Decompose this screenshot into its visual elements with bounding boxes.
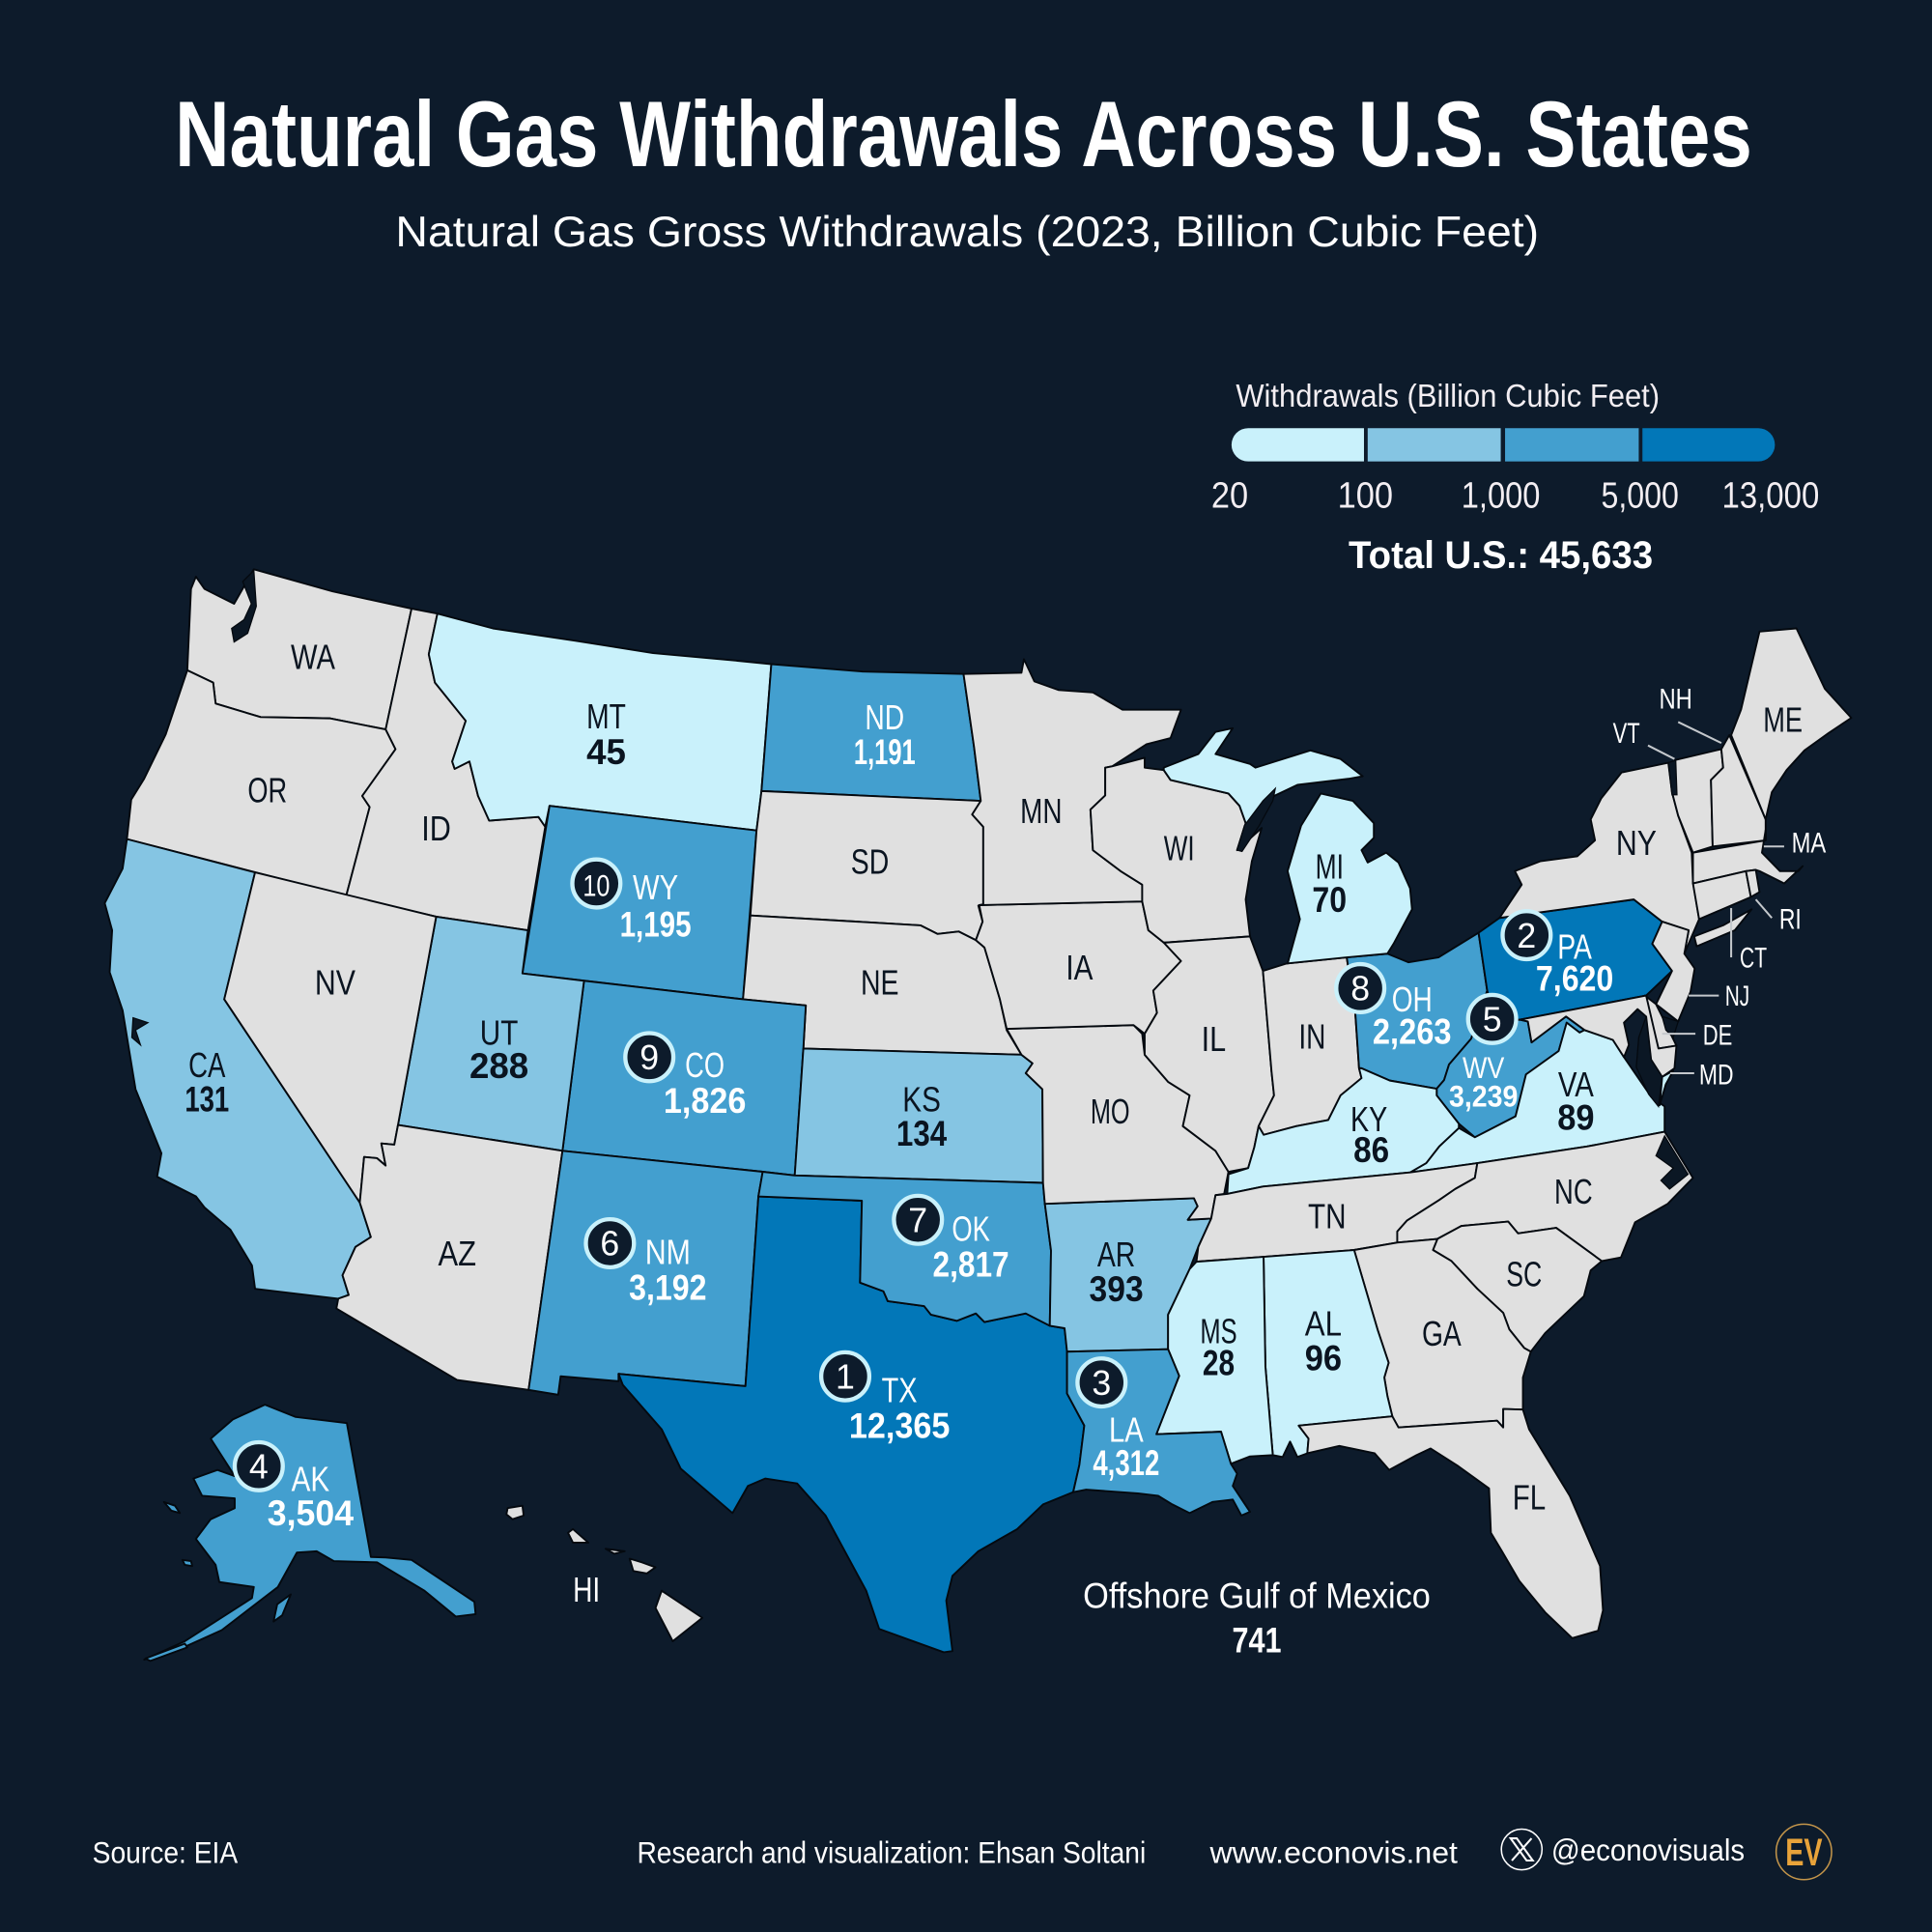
badge 10 WY: 10 <box>582 867 610 902</box>
state: GA <box>1354 1239 1531 1428</box>
footer handle: @econovisuals <box>1551 1833 1745 1867</box>
state: KY <box>1227 1068 1459 1194</box>
legend: 100 <box>1338 475 1393 517</box>
state labels without data: NV <box>315 963 355 1002</box>
labels for small states outside the map: CT <box>1740 942 1767 974</box>
state: IA <box>976 901 1181 1034</box>
state labels without data: NY <box>1616 824 1657 863</box>
state labels without data: ME <box>1763 701 1803 740</box>
value labels on light states: KS <box>902 1081 941 1120</box>
labels for small states outside the map: DE <box>1703 1020 1732 1052</box>
labels for small states outside the map: HI <box>573 1571 600 1609</box>
labels for small states outside the map: NH <box>1659 683 1692 715</box>
value labels on light states: 393 <box>1090 1269 1144 1309</box>
state: MI lower peninsula <box>1287 793 1412 963</box>
state: MT <box>429 613 771 831</box>
state labels without data: IN <box>1298 1017 1325 1056</box>
value labels on dark states <box>268 698 1613 1533</box>
state: AL <box>1264 1250 1392 1457</box>
badge 4 AK <box>235 1442 283 1491</box>
value labels on light states: VA <box>1558 1065 1594 1104</box>
legend: 5,000 <box>1602 475 1679 517</box>
state: HI Maui <box>630 1559 656 1574</box>
state: OR <box>127 670 395 895</box>
state: HI Kauai <box>506 1506 524 1520</box>
state: AK Aleutians <box>146 1644 187 1661</box>
state: NH <box>1711 735 1766 846</box>
state: HI Oahu <box>568 1529 588 1543</box>
state: MN <box>963 659 1181 905</box>
state: WA <box>187 569 412 729</box>
icon: X logo <box>1501 1829 1542 1870</box>
value labels on dark states: OH <box>1392 980 1433 1019</box>
state: LA <box>1067 1350 1250 1516</box>
subtitle: Natural Gas Gross Withdrawals (2023, Billion Cubic Feet) <box>395 209 1539 256</box>
footer website: www.econovis.net <box>1209 1835 1458 1870</box>
footer source: Source: EIA <box>93 1835 239 1870</box>
state: NJ <box>1652 922 1694 1021</box>
state: ID <box>346 609 545 930</box>
state labels without data: FL <box>1513 1478 1546 1517</box>
state: MA <box>1693 830 1803 884</box>
state labels without data: WA <box>291 639 335 677</box>
value labels on dark states: WY <box>633 868 678 907</box>
logo: EV: EV <box>1785 1832 1823 1874</box>
state: NY <box>1499 763 1699 953</box>
value labels on light states: 45 <box>586 732 626 772</box>
state labels without data: MN <box>1020 792 1062 831</box>
offshore callout <box>1083 1577 1431 1660</box>
labels for small states outside the map: RI <box>1779 904 1802 936</box>
state: IL <box>1145 936 1274 1172</box>
offshore callout: Offshore Gulf of Mexico <box>1083 1577 1431 1616</box>
state: WI <box>1091 757 1262 943</box>
value labels on light states: MI <box>1316 847 1344 886</box>
value labels on dark states: WV <box>1463 1050 1505 1085</box>
value labels on dark states: 3,504 <box>268 1493 354 1533</box>
badge 3 LA <box>1077 1358 1125 1406</box>
state: NE <box>743 916 1021 1055</box>
state: SD <box>751 791 983 940</box>
badge 6 NM <box>586 1219 634 1267</box>
state: AK Kodiak <box>273 1595 291 1622</box>
state: KS <box>795 1048 1043 1182</box>
value labels on light states: KY <box>1350 1100 1387 1139</box>
state: NY Long Island <box>1694 909 1751 947</box>
value labels on dark states: NM <box>645 1234 691 1272</box>
state labels without data: IA <box>1065 949 1094 987</box>
value labels on light states: 96 <box>1305 1338 1342 1378</box>
state: ND <box>761 665 980 801</box>
state: TX <box>618 1197 1084 1652</box>
badge 7 OK: 7 <box>908 1202 927 1240</box>
state labels without data: NC <box>1554 1173 1593 1211</box>
state: AK St Lawrence Island <box>164 1502 180 1513</box>
badge 9 CO: 9 <box>639 1038 659 1077</box>
value labels on light states: MS <box>1200 1312 1237 1350</box>
rank badges <box>235 860 1550 1491</box>
value labels on light states: UT <box>480 1014 518 1053</box>
value labels on dark states: 4,312 <box>1093 1443 1159 1483</box>
state labels without data: TN <box>1308 1198 1346 1236</box>
legend: Total U.S.: 45,633 <box>1349 534 1653 577</box>
value labels on dark states: 2,263 <box>1373 1011 1452 1051</box>
value labels on light states: 288 <box>469 1046 528 1086</box>
state: VA <box>1410 1023 1664 1173</box>
value labels on dark states: ND <box>865 698 904 737</box>
state: DE <box>1645 996 1676 1048</box>
state: CO <box>562 980 806 1176</box>
state: RI <box>1746 870 1759 897</box>
value labels on dark states: CO <box>685 1046 724 1085</box>
state: AR <box>1045 1198 1211 1351</box>
value labels on dark states: 3,192 <box>629 1268 707 1308</box>
value labels on dark states: 1,191 <box>854 732 916 772</box>
state: VT <box>1672 750 1723 853</box>
value labels on light states: 28 <box>1203 1343 1235 1382</box>
state labels without data: GA <box>1422 1315 1462 1353</box>
state labels without data: NE <box>861 963 898 1002</box>
value labels on light states: CA <box>188 1046 226 1085</box>
map of U.S. states <box>104 569 1851 1661</box>
state: NM <box>528 1151 763 1395</box>
value labels on dark states: PA <box>1557 927 1592 966</box>
value labels on dark states: 7,620 <box>1536 959 1613 999</box>
state: MO <box>1007 1025 1229 1220</box>
state: CA <box>104 839 371 1298</box>
value labels on light states: AL <box>1305 1305 1342 1344</box>
water cut-outs: Puget Sound, bays and lakes <box>131 571 1688 1189</box>
state labels without data: OR <box>247 771 287 810</box>
state: MS <box>1156 1257 1273 1463</box>
labels for small states outside the map: MD <box>1699 1059 1734 1091</box>
footer credit: Research and visualization: Ehsan Soltani <box>637 1835 1146 1870</box>
labels for small states outside the map: NJ <box>1725 980 1749 1012</box>
state: HI Big Island <box>656 1591 702 1641</box>
badge 5 WV: 5 <box>1483 1001 1502 1039</box>
state: CT <box>1693 871 1750 920</box>
state labels without data: MO <box>1091 1093 1130 1131</box>
state labels without data: AZ <box>438 1235 476 1273</box>
value labels on light states: 131 <box>185 1080 229 1120</box>
value labels on light states: 86 <box>1353 1130 1389 1170</box>
badge 2 PA: 2 <box>1517 917 1536 955</box>
labels for small states outside the map <box>573 683 1827 1609</box>
value labels on dark states: AK <box>292 1460 329 1498</box>
state: WY <box>523 806 756 999</box>
value labels on dark states: 2,817 <box>933 1244 1009 1284</box>
legend: Withdrawals (Billion Cubic Feet) <box>1236 379 1660 414</box>
offshore callout: 741 <box>1233 1620 1282 1660</box>
badge 5 WV <box>1468 995 1517 1043</box>
logo: EV <box>1776 1824 1832 1880</box>
badge 1 TX <box>821 1352 869 1401</box>
legend: 13,000 <box>1722 475 1819 517</box>
state labels without data: WI <box>1164 829 1195 867</box>
state labels without data: SD <box>851 842 889 881</box>
state: AK Nunivak Island <box>183 1560 192 1566</box>
value labels on dark states: 1,195 <box>620 904 692 944</box>
state: UT <box>398 917 584 1151</box>
value labels on light states: 134 <box>896 1114 948 1153</box>
value labels on dark states: OK <box>952 1209 990 1248</box>
legend <box>1211 379 1819 577</box>
badge 6 NM: 6 <box>600 1225 619 1264</box>
leader lines for small states <box>1648 722 1784 1073</box>
value labels on light states: AR <box>1097 1236 1135 1274</box>
value labels on dark states: TX <box>882 1372 918 1410</box>
badge 8 OH <box>1336 964 1384 1012</box>
state: OK <box>758 1172 1051 1325</box>
badge 2 PA <box>1502 911 1550 959</box>
state: MI upper peninsula <box>1164 728 1363 823</box>
state labels without data: IL <box>1202 1020 1226 1059</box>
state: IN <box>1259 957 1361 1135</box>
state: WV <box>1436 991 1584 1137</box>
state: VA eastern shore <box>1660 1070 1673 1105</box>
value labels on dark states: 3,239 <box>1449 1078 1518 1113</box>
value labels on light states: MT <box>586 697 626 736</box>
labels for small states outside the map: MA <box>1792 828 1827 860</box>
value labels on dark states: LA <box>1109 1410 1144 1449</box>
state: TN <box>1197 1163 1477 1262</box>
state: ME <box>1731 629 1851 819</box>
state: PA <box>1479 899 1672 1021</box>
value labels on light states <box>185 697 1595 1382</box>
badge 1 TX: 1 <box>836 1357 855 1396</box>
value labels on light states: 89 <box>1557 1098 1595 1138</box>
labels for small states outside the map: VT <box>1613 718 1640 750</box>
state: AZ <box>336 1125 562 1390</box>
state labels without data: SC <box>1506 1256 1542 1294</box>
state labels without data <box>247 639 1803 1517</box>
value labels on dark states: 1,826 <box>664 1081 746 1121</box>
badge 7 OK <box>894 1196 942 1244</box>
value labels on dark states: 12,365 <box>849 1406 950 1446</box>
state: SC <box>1433 1222 1602 1351</box>
state: NV <box>224 872 437 1203</box>
state labels without data: ID <box>421 810 451 848</box>
badge 4 AK: 4 <box>249 1448 269 1487</box>
state: FL <box>1298 1409 1603 1638</box>
badge 9 CO <box>625 1034 673 1081</box>
state: AK <box>144 1405 475 1660</box>
badge 3 LA: 3 <box>1092 1364 1111 1403</box>
legend: 1,000 <box>1462 475 1540 517</box>
state: MD <box>1520 996 1676 1077</box>
state: HI Molokai <box>606 1548 625 1553</box>
value labels on light states: 70 <box>1312 880 1347 920</box>
badge 10 WY <box>572 860 620 907</box>
state: NC <box>1397 1132 1693 1261</box>
badge 8 OH: 8 <box>1350 970 1370 1009</box>
legend: 20 <box>1211 475 1248 517</box>
state: OH <box>1347 933 1488 1089</box>
